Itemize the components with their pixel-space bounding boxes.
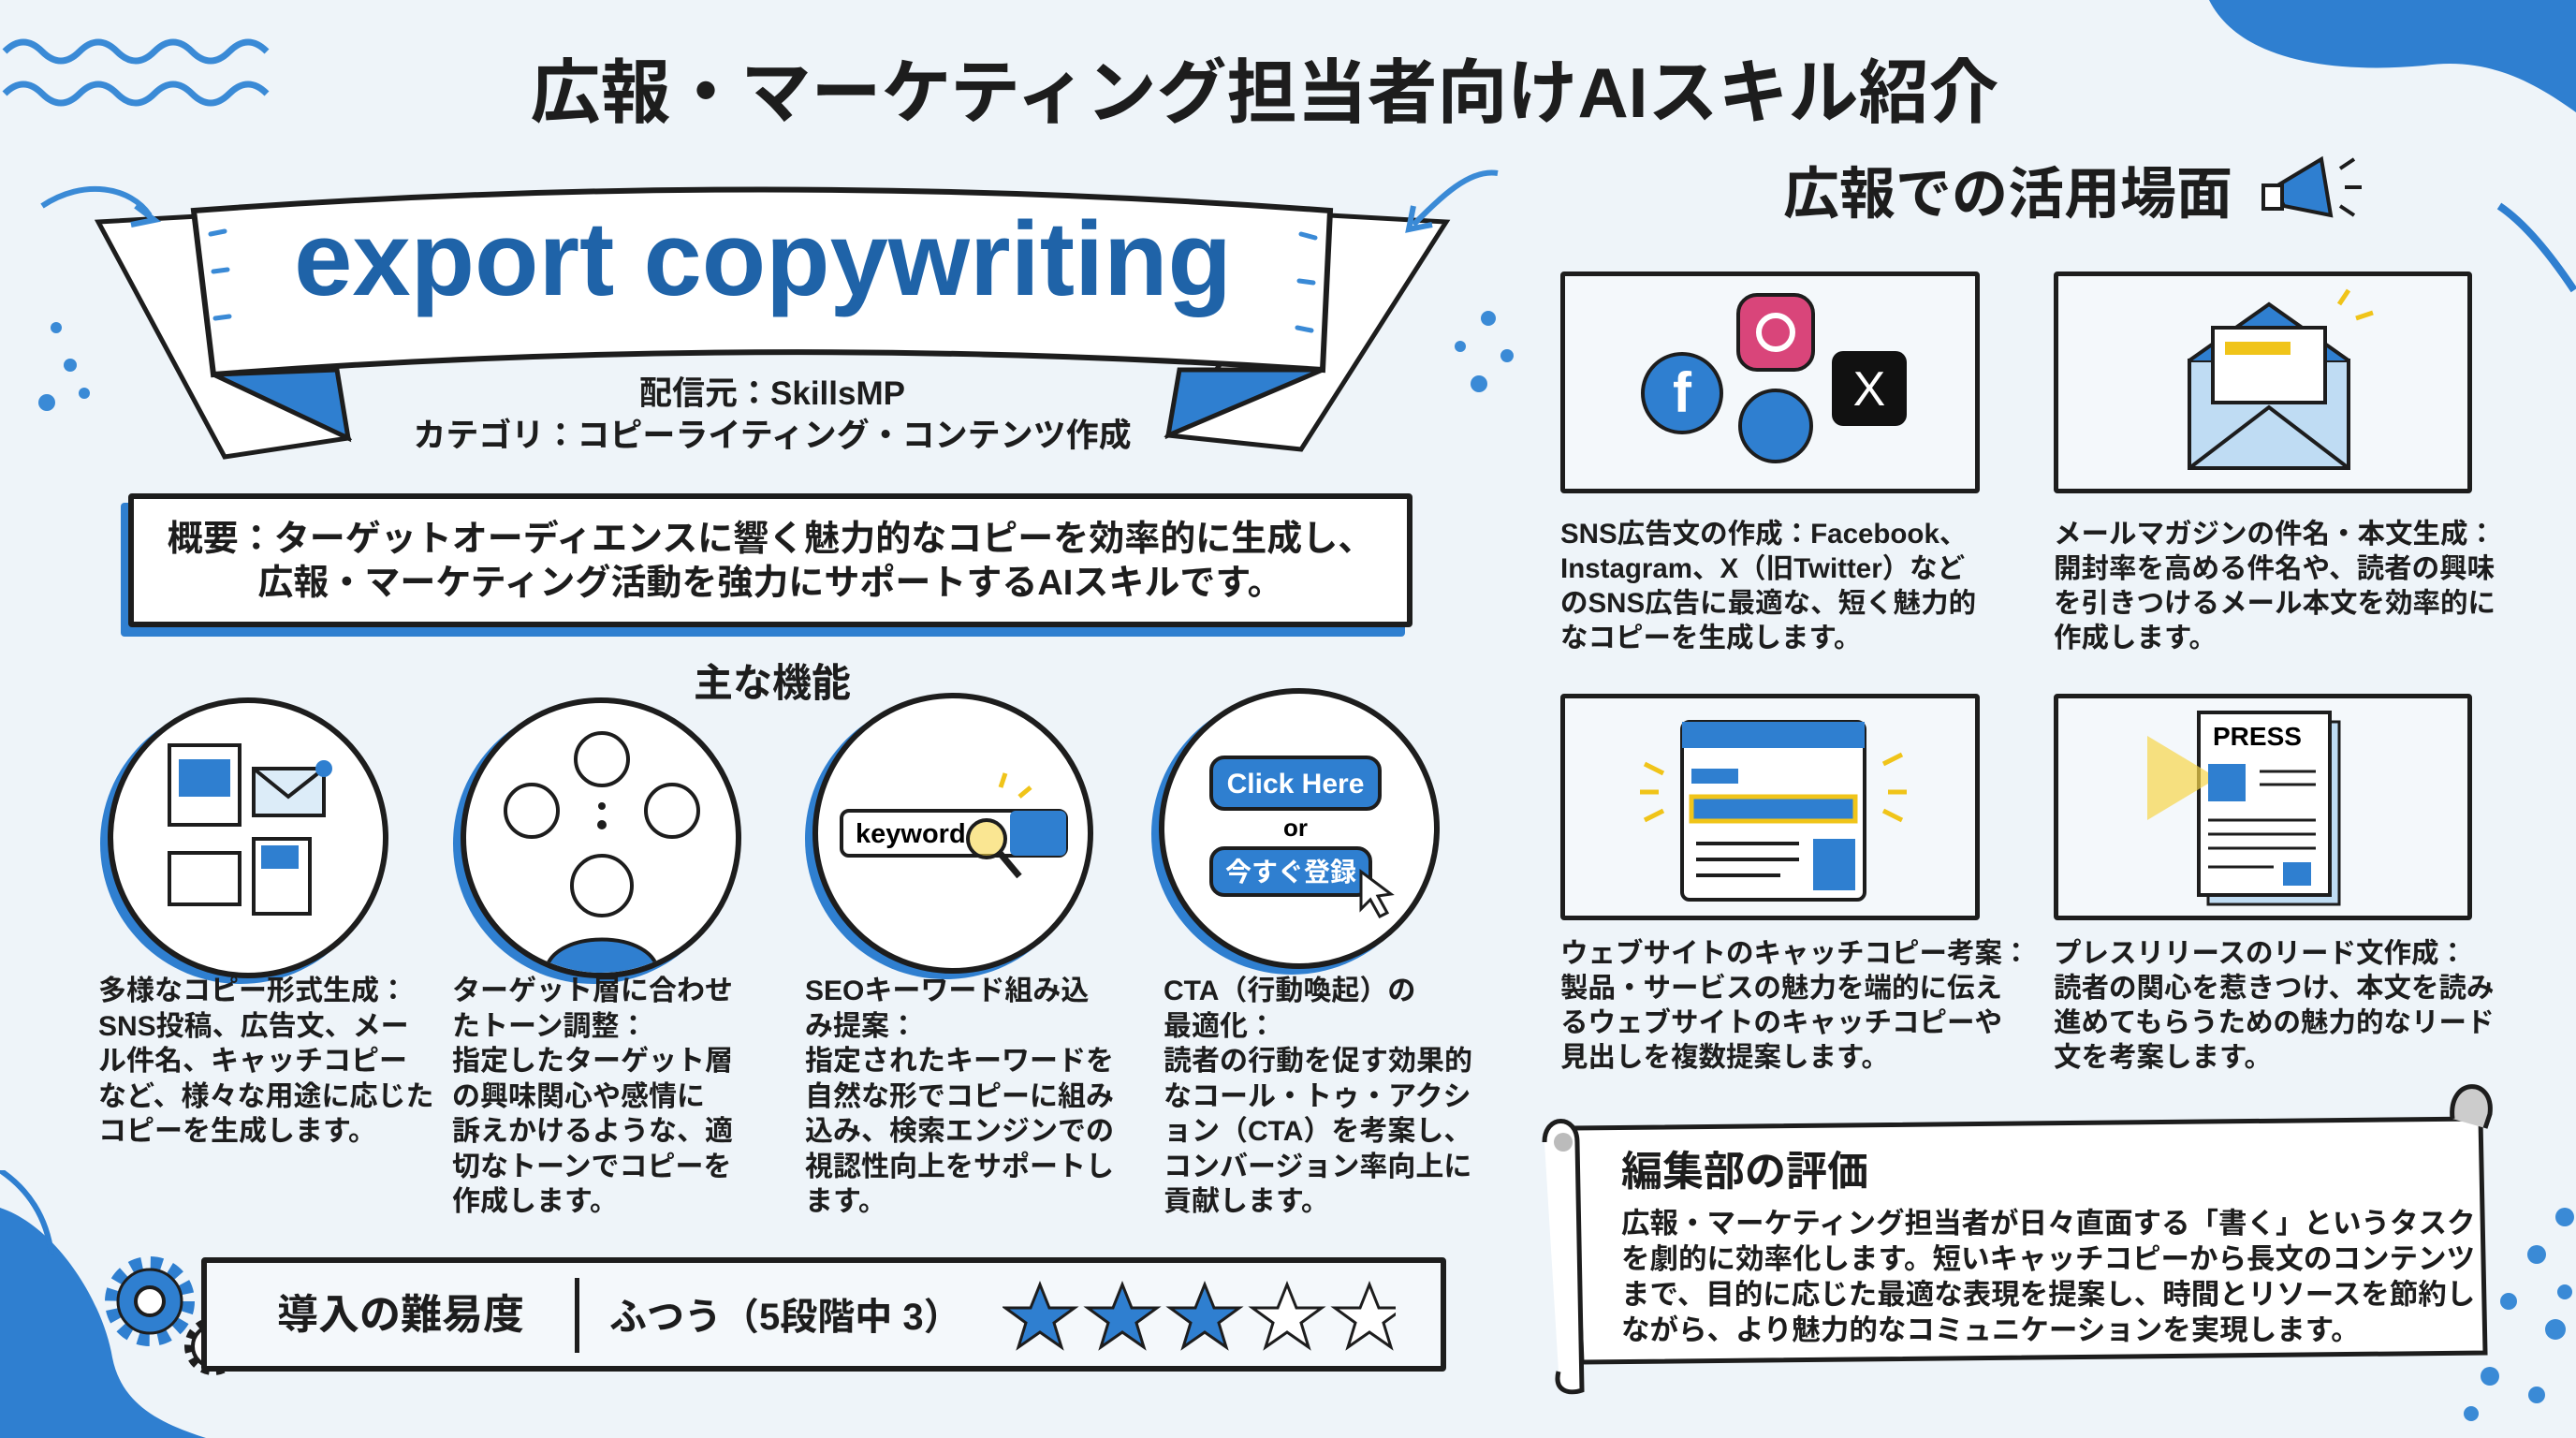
card 1 text: [1560, 519, 1976, 653]
feature 1 text: 多様なコピー形式生成：: [98, 976, 407, 1006]
feature 3 text: み提案：: [805, 1011, 917, 1041]
heading: main features: 主な機能: [694, 661, 851, 705]
card 3 text: 見出しを複数提案します。: [1560, 1042, 1889, 1073]
feature 4 icon: or: [1283, 814, 1308, 842]
card 1 text: なコピーを生成します。: [1560, 623, 1862, 653]
card 1 text: のSNS広告に最適な、短く魅力的: [1560, 588, 1976, 619]
review text: ながら、より魅力的なコミュニケーションを実現します。: [1621, 1314, 2360, 1346]
card 3 text: [1560, 938, 2030, 1073]
card 2: mail: [2054, 271, 2472, 493]
feature 2 text: [452, 976, 733, 1217]
feature 4 text: [1164, 976, 1472, 1217]
card 1: SNS: [1560, 271, 1980, 493]
feature 3 text: ます。: [805, 1186, 886, 1217]
banner title text: export copywriting: [294, 200, 1232, 317]
icon: megaphone: [2261, 155, 2362, 217]
source and category: 配信元：SkillsMP: [639, 375, 905, 412]
review text: [1621, 1208, 2476, 1346]
overview box: 広報・マーケティング活動を強力にサポートするAIスキルです。: [257, 564, 1283, 603]
feature 2 text: 指定したターゲット層: [452, 1046, 733, 1077]
feature 4 icon: Click Here: [1227, 769, 1364, 800]
feature 2 text: ターゲット層に合わせ: [452, 976, 733, 1006]
feature 4 icon: 今すぐ登録: [1225, 858, 1356, 887]
card 4: press: PRESS: [2213, 722, 2302, 751]
decoration: waves: [2, 39, 270, 107]
feature 1 text: など、様々な用途に応じた: [98, 1080, 434, 1112]
feature 2 icon: [461, 697, 741, 978]
card 3: website: [1560, 694, 1980, 920]
card 4 text: プレスリリースのリード文作成：: [2054, 938, 2466, 969]
feature 2 text: 作成します。: [452, 1186, 618, 1217]
card 2 text: [2054, 519, 2496, 653]
source and category: [413, 375, 1132, 454]
feature 3 text: 込み、検索エンジンでの: [805, 1116, 1114, 1147]
card 2 text: 作成します。: [2054, 623, 2217, 653]
feature 2 text: たトーン調整：: [452, 1011, 648, 1041]
feature 3 text: 視認性向上をサポートし: [805, 1152, 1114, 1181]
overview box: 概要：ターゲットオーディエンスに響く魅力的なコピーを効率的に生成し、: [168, 520, 1373, 559]
decoration: top-right blob: [2209, 0, 2576, 112]
feature 4 text: CTA（行動喚起）の: [1164, 976, 1415, 1006]
feature 4 text: ョン（CTA）を考案し、: [1164, 1116, 1471, 1147]
overview box: [128, 493, 1412, 627]
source and category: カテゴリ：コピーライティング・コンテンツ作成: [413, 418, 1132, 454]
decoration: right curve: [2497, 202, 2576, 292]
feature 4 text: コンバージョン率向上に: [1164, 1152, 1471, 1181]
card 4 text: 進めてもらうための魅力的なリード: [2054, 1007, 2495, 1038]
feature 1 text: SNS投稿、広告文、メー: [98, 1011, 409, 1041]
decoration: dots right: [2464, 1208, 2574, 1421]
card 2 text: メールマガジンの件名・本文生成：: [2054, 519, 2496, 550]
feature 4 text: 最適化：: [1164, 1011, 1276, 1041]
feature 1 text: ル件名、キャッチコピー: [98, 1046, 407, 1077]
card 3 text: 製品・サービスの魅力を端的に伝え: [1560, 973, 2002, 1004]
feature 4 icon: [1159, 688, 1440, 969]
star rating: [1003, 1281, 1396, 1351]
review text: 広報・マーケティング担当者が日々直面する「書く」というタスク: [1621, 1208, 2476, 1240]
card 1: SNS: X: [1853, 362, 1885, 417]
feature 4 text: なコール・トゥ・アクシ: [1164, 1080, 1471, 1112]
feature 3 text: 自然な形でコピーに組み: [805, 1080, 1114, 1112]
card 1 text: SNS広告文の作成：Facebook、: [1560, 519, 1967, 550]
review heading: 編集部の評価: [1621, 1149, 1868, 1195]
feature 2 text: 切なトーンでコピーを: [452, 1152, 732, 1181]
title: 広報・マーケティング担当者向けAIスキル紹介: [530, 53, 1999, 132]
decoration: arrows and dots near banner: [38, 185, 161, 411]
card 4 text: 読者の関心を惹きつけ、本文を読み: [2054, 973, 2495, 1004]
feature 4 text: 貢献します。: [1164, 1186, 1329, 1217]
card 4: press: [2054, 694, 2472, 920]
feature 3 text: [805, 976, 1114, 1217]
feature 3 icon: keyword: [856, 819, 966, 849]
editorial review scroll: [1543, 1084, 2493, 1395]
feature 2 text: の興味関心や感情に: [452, 1080, 705, 1112]
feature 4 text: 読者の行動を促す効果的: [1164, 1046, 1472, 1077]
icon: gears: [105, 1256, 225, 1375]
difficulty bar: ふつう（5段階中 3）: [609, 1297, 961, 1338]
card 3 text: ウェブサイトのキャッチコピー考案：: [1560, 938, 2030, 969]
review text: を劇的に効率化します。短いキャッチコピーから長文のコンテンツ: [1621, 1243, 2475, 1275]
card 1 text: Instagram、X（旧Twitter）など: [1560, 553, 1965, 584]
heading: PR use cases: 広報での活用場面: [1783, 163, 2232, 226]
feature 2 text: 訴えかけるような、適: [452, 1116, 733, 1147]
card 4 text: 文を考案します。: [2054, 1042, 2272, 1073]
card 3 text: るウェブサイトのキャッチコピーや: [1560, 1007, 2002, 1038]
feature 1 text: コピーを生成します。: [98, 1116, 376, 1147]
card 2 text: 開封率を高める件名や、読者の興味: [2054, 553, 2495, 584]
difficulty bar: 導入の難易度: [277, 1292, 524, 1338]
difficulty bar: [201, 1257, 1446, 1372]
card 2 text: を引きつけるメール本文を効率的に: [2054, 588, 2496, 619]
feature 3 icon: [812, 693, 1093, 974]
card 4 text: [2054, 938, 2495, 1073]
decoration: bottom-left blob: [0, 1170, 206, 1438]
feature 1 text: [98, 976, 434, 1147]
feature 3 text: SEOキーワード組み込: [805, 976, 1089, 1006]
feature 1 icon: [108, 697, 388, 978]
banner: export copywriting: [95, 187, 1451, 460]
card 1: SNS: f: [1673, 361, 1692, 424]
feature 3 text: 指定されたキーワードを: [805, 1046, 1114, 1077]
review text: まで、目的に応じた最適な表現を提案し、時間とリソースを節約し: [1621, 1279, 2475, 1311]
